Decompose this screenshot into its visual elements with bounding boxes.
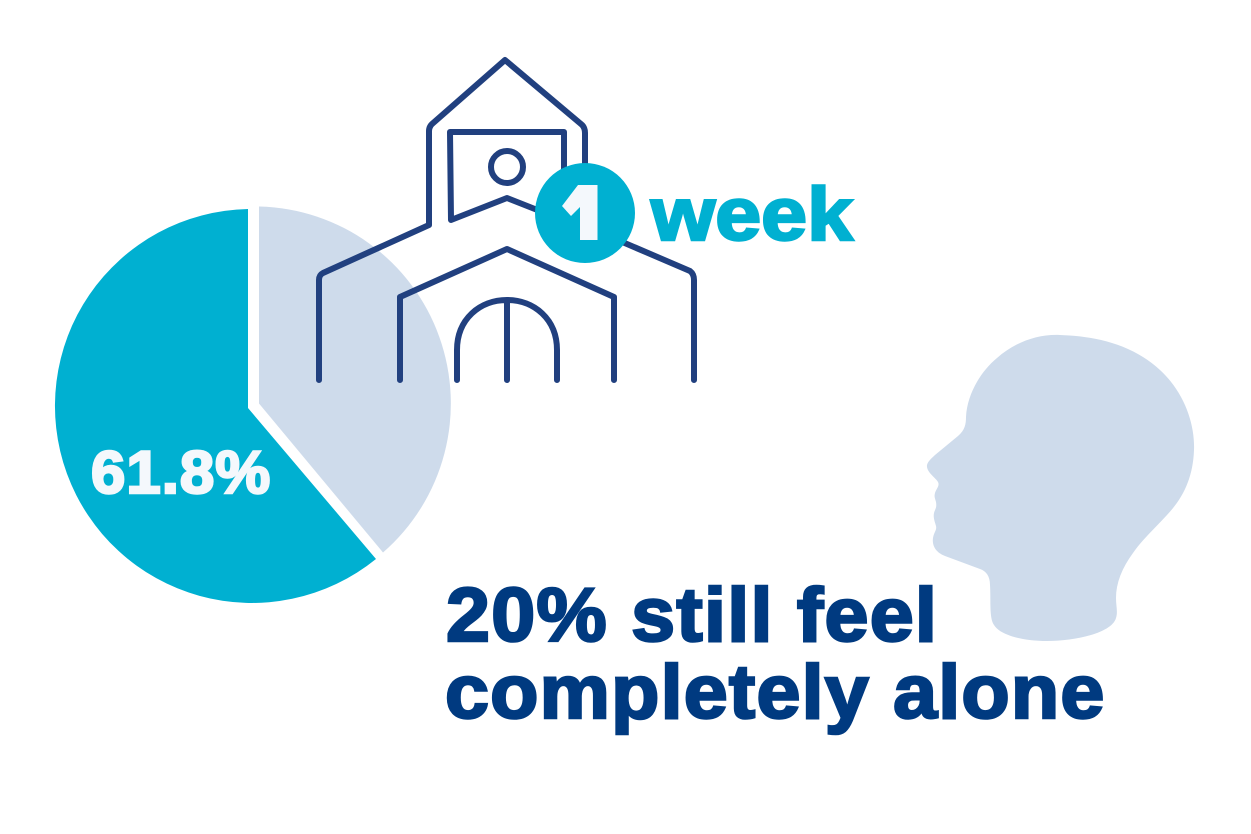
badge: 1 week: [535, 163, 853, 274]
headline: [445, 573, 1104, 735]
entrance roof: [400, 249, 614, 380]
pie slice: 61.8%: [55, 209, 376, 603]
tower round window: [491, 151, 523, 183]
arched door: [457, 300, 557, 380]
week label: week: [650, 172, 853, 256]
headline line 2: completely alone: [445, 650, 1104, 735]
icon: school building: [319, 60, 694, 380]
pie chart: [55, 206, 451, 603]
pie label: 61.8%: 61.8%: [91, 439, 270, 506]
icon: head silhouette: [927, 335, 1194, 641]
infographic canvas: [54, 56, 1194, 736]
building outer outline: [319, 60, 694, 380]
badge number: 1: [560, 172, 611, 274]
tower window frame: [450, 132, 564, 220]
pie slice: remaining 38.2%: [259, 206, 451, 552]
badge circle: [535, 163, 635, 263]
headline line 1: 20% still feel: [446, 573, 937, 658]
